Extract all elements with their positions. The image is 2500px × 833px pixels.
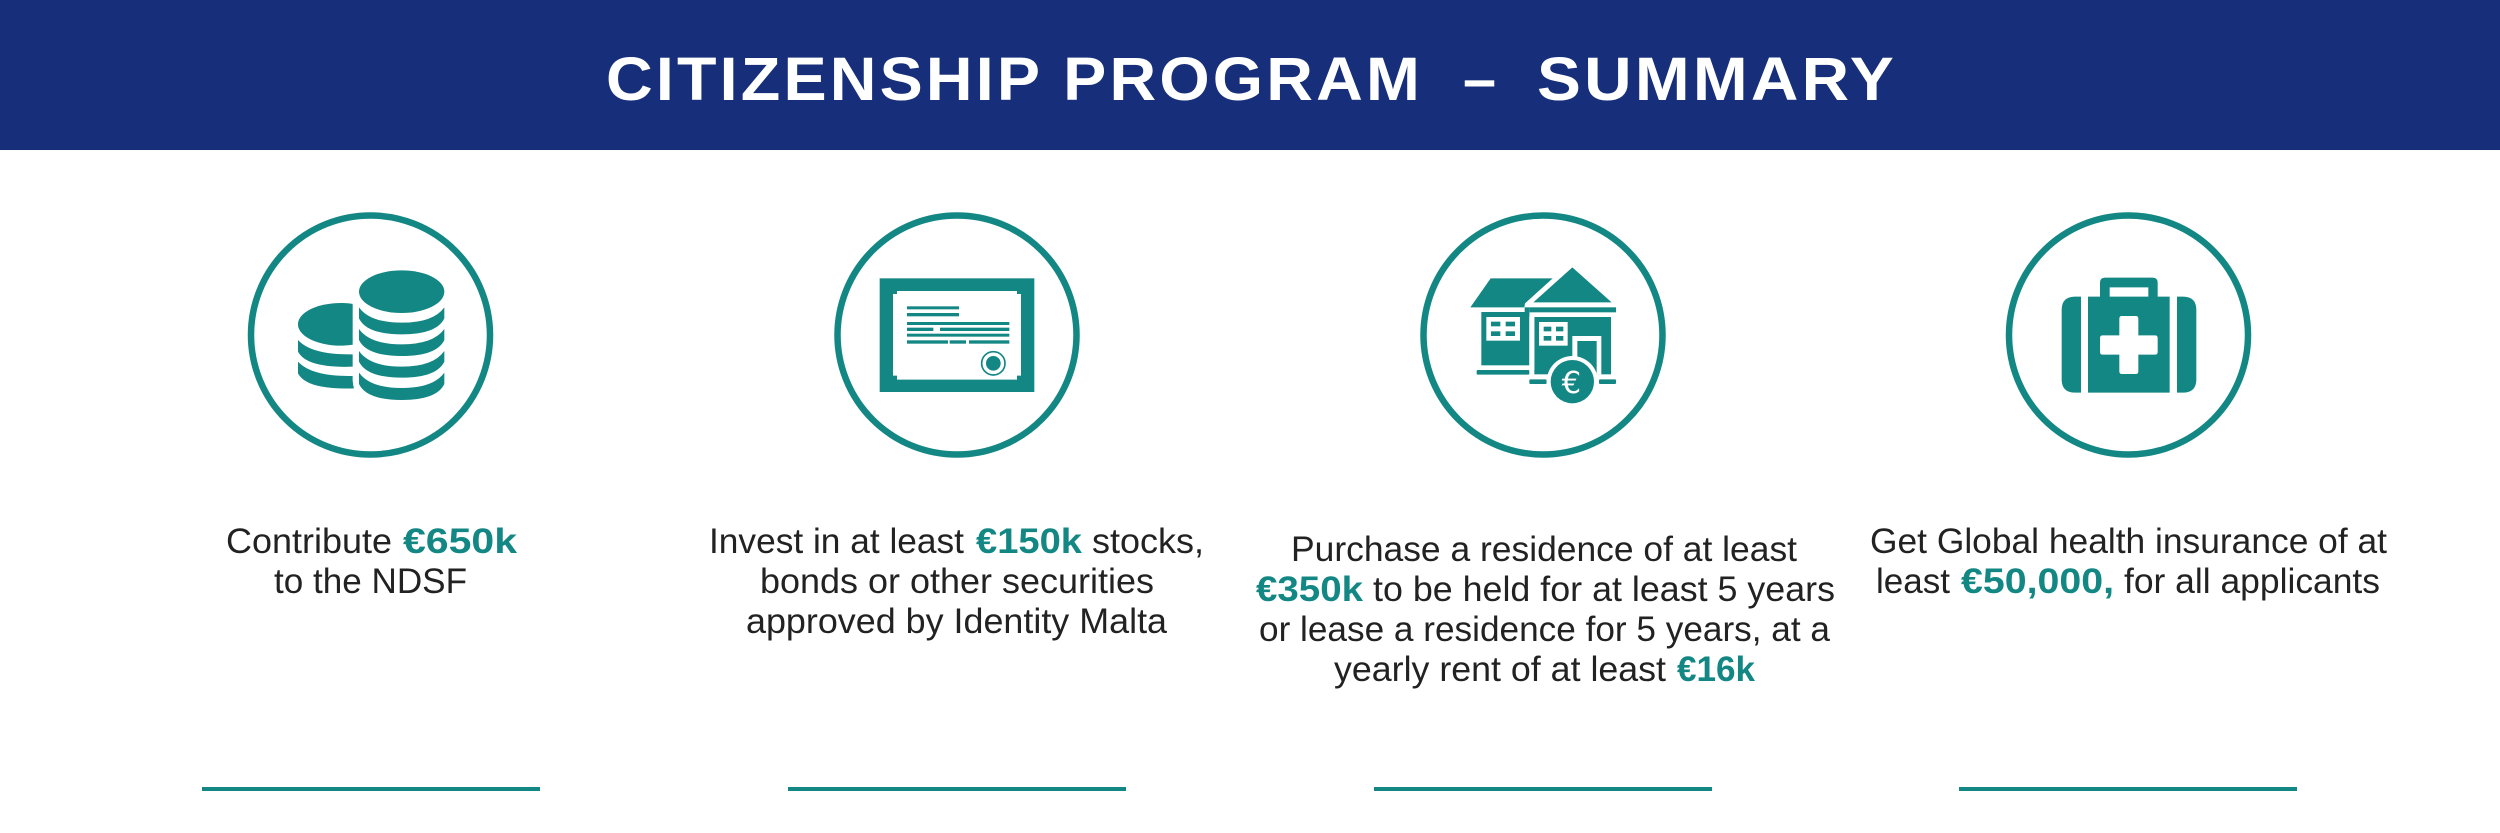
text: investment [709,522,1204,641]
panel: contribute to NDSF [202,216,540,791]
panel: purchase or lease residence [1256,216,1835,791]
title: – [1463,45,1499,113]
text: residence [1256,530,1835,689]
text: residence: €350k [1256,570,1364,609]
text: residence: Purchase a residence of at least [1291,530,1797,569]
divider line [1959,787,2297,791]
text: residence: to be held for at least 5 years [1373,570,1835,609]
icon: houses with euro coin in circle: € [1562,366,1581,401]
text: insurance [1870,522,2387,601]
text: investment: €150k [976,522,1083,561]
title: CITIZENSHIP PROGRAM [606,45,1423,113]
text: insurance: for all applicants [2124,562,2380,601]
text: insurance: €50,000, [1961,562,2114,601]
panel: health insurance [1870,216,2387,791]
text: residence: yearly rent of at least [1334,650,1666,689]
icon: certificate in circle [838,216,1076,454]
text: investment: approved by Identity Malta [746,602,1168,641]
text: contribution: Contribute [226,522,392,561]
header banner [0,0,2500,150]
text: residence: €16k [1677,650,1756,689]
divider line [202,787,540,791]
text: investment: stocks, [1092,522,1204,561]
text: insurance: least [1876,562,1950,601]
icon: coin stacks in circle [251,216,490,454]
text: contribution [226,522,518,601]
divider line [1374,787,1712,791]
icon: houses with euro coin in circle [1424,216,1662,454]
text: contribution: to the NDSF [274,562,467,601]
text: residence: or lease a residence for 5 years, at a [1259,610,1831,649]
panel: invest in securities [709,216,1204,791]
text: investment: bonds or other securities [760,562,1154,601]
title: SUMMARY [1537,45,1897,113]
icon: medical kit in circle [2009,216,2248,454]
title [606,45,1897,113]
text: investment: Invest in at least [709,522,964,561]
text: insurance: Get Global health insurance of at [1870,522,2387,561]
divider line [788,787,1126,791]
text: contribution: €650k [403,522,518,561]
